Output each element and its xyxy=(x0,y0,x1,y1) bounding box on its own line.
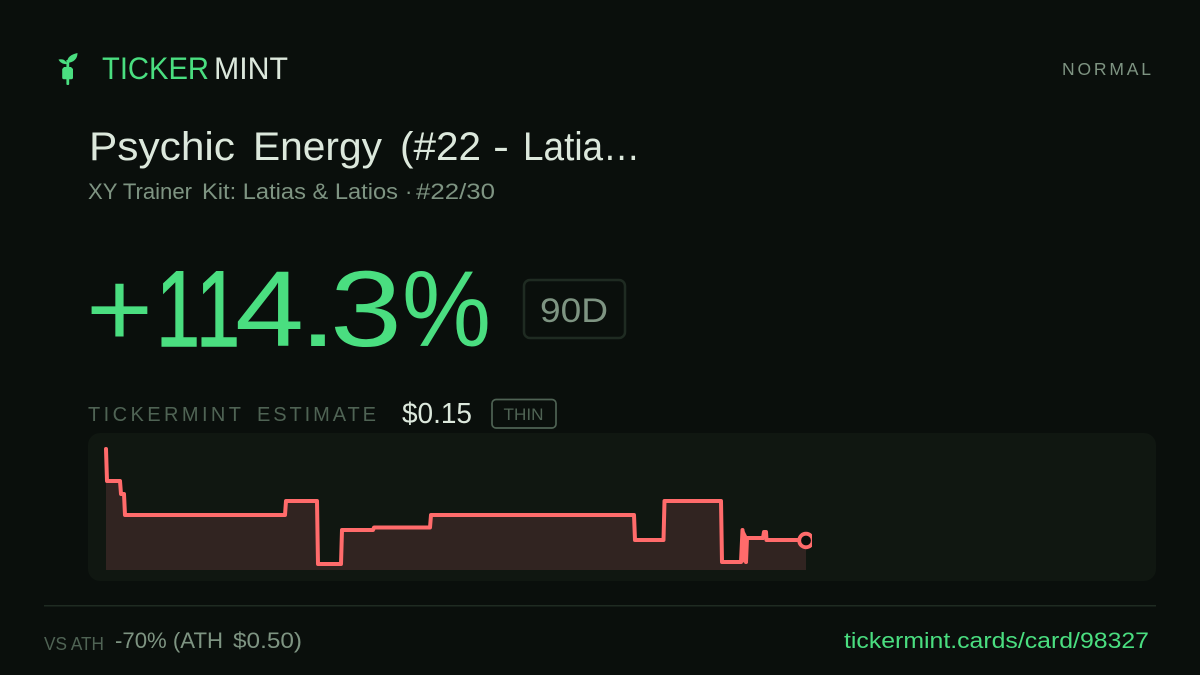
percent change: 1 xyxy=(156,248,200,369)
percent change xyxy=(86,248,491,369)
icon: sprout xyxy=(58,53,78,85)
panel: price chart xyxy=(104,447,812,570)
footer: ath comparison: VS ATH xyxy=(44,634,104,654)
logo xyxy=(58,50,288,86)
card title: - xyxy=(493,125,509,169)
chart end marker xyxy=(799,534,813,547)
card subtitle xyxy=(88,179,495,204)
chart spike xyxy=(741,529,748,563)
card title: (#22 xyxy=(400,125,481,169)
estimate label xyxy=(88,404,376,426)
estimate price: $0.15 xyxy=(402,398,472,430)
percent change: 1 xyxy=(196,248,240,369)
card title xyxy=(89,125,640,169)
liquidity badge: THIN xyxy=(504,405,544,424)
estimate label: TICKERMINT xyxy=(88,404,241,426)
footer: ath comparison: -70% (ATH xyxy=(115,628,223,653)
footer: ath comparison: $0.50) xyxy=(233,628,302,653)
card title: Latia… xyxy=(523,125,640,169)
wordmark: MINT xyxy=(214,50,288,86)
rarity label: NORMAL xyxy=(1062,59,1151,79)
footer: ath comparison xyxy=(44,628,302,654)
footer divider xyxy=(44,605,1156,606)
period badge: 90D xyxy=(540,292,608,330)
percent change: 3 xyxy=(330,248,402,369)
chart line xyxy=(106,449,806,564)
card subtitle: #22/30 xyxy=(416,179,495,204)
card title: Psychic xyxy=(89,125,235,169)
card subtitle: · xyxy=(405,179,412,204)
footer: card url: tickermint.cards/card/98327 xyxy=(844,628,1149,653)
wordmark: TICKER xyxy=(102,50,209,86)
card subtitle: XY Trainer xyxy=(88,179,192,204)
period badge xyxy=(524,280,625,338)
percent change: 4 xyxy=(235,248,304,369)
percent change: + xyxy=(86,248,153,369)
chart area fill xyxy=(106,449,806,570)
estimate label: ESTIMATE xyxy=(257,404,376,426)
percent change: % xyxy=(402,248,491,369)
liquidity badge xyxy=(492,400,556,428)
card subtitle: Kit: Latias & Latios xyxy=(202,179,398,204)
percent change: . xyxy=(298,248,338,369)
wordmark xyxy=(102,50,288,86)
card title: Energy xyxy=(253,125,382,169)
